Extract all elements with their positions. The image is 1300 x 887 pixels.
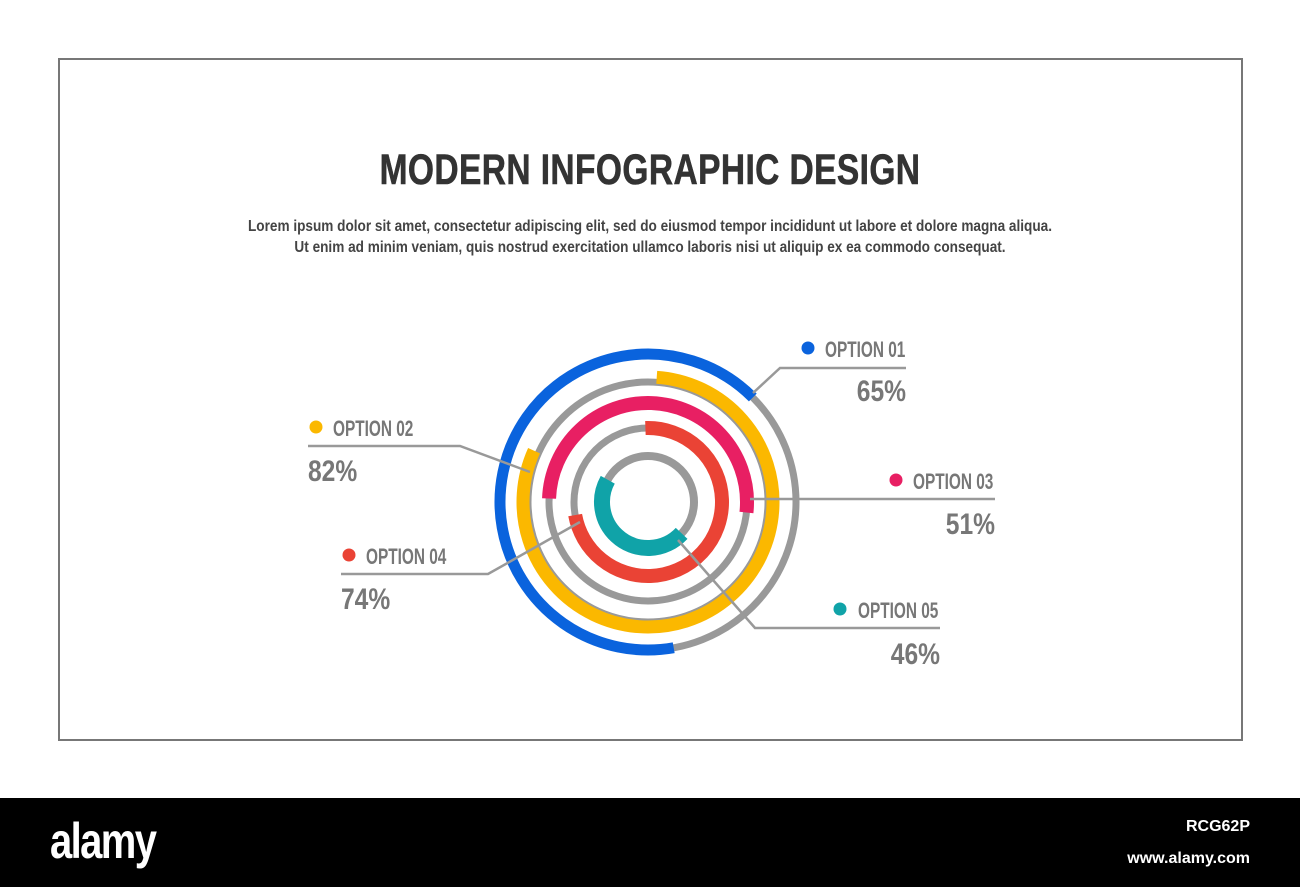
option 04: OPTION 04 [366,545,447,570]
option 01 [802,338,906,408]
ring 1 [477,331,819,673]
leader lines [308,368,995,628]
subtitle: Ut enim ad minim veniam, quis nostrud exercitation ullamco laboris nisi ut aliquip ex ea commodo consequat. [294,239,1006,256]
option 02: OPTION 02 [333,417,413,442]
bottom bar: www.alamy.com [1127,850,1250,867]
option 04: 74% [341,582,390,616]
frame [58,58,1243,741]
ring 5 [583,437,713,567]
ring 3 [546,400,750,604]
bottom bar: alamy [50,813,155,869]
labels [308,338,995,671]
option 02: 82% [308,454,357,488]
subtitle [248,218,1052,256]
option 05: OPTION 05 [858,599,939,624]
option 05: 46% [891,637,940,671]
bottom bar: RCG62P [1186,818,1250,835]
option 03: 51% [946,507,995,541]
option 04 [341,545,447,616]
option 01: OPTION 01 [825,338,906,363]
option 05 [834,599,940,671]
option 01: 65% [857,374,906,408]
subtitle: Lorem ipsum dolor sit amet, consectetur adipiscing elit, sed do eiusmod tempor incididunt ut labore et dolore magna aliqua. [248,218,1052,235]
option 03: OPTION 03 [913,470,993,495]
option 02 [308,417,413,488]
title: MODERN INFOGRAPHIC DESIGN [380,146,920,194]
ring 4 [571,425,725,579]
ring 2 [515,369,781,635]
bottom bar [0,798,1300,887]
option 03 [890,470,995,541]
